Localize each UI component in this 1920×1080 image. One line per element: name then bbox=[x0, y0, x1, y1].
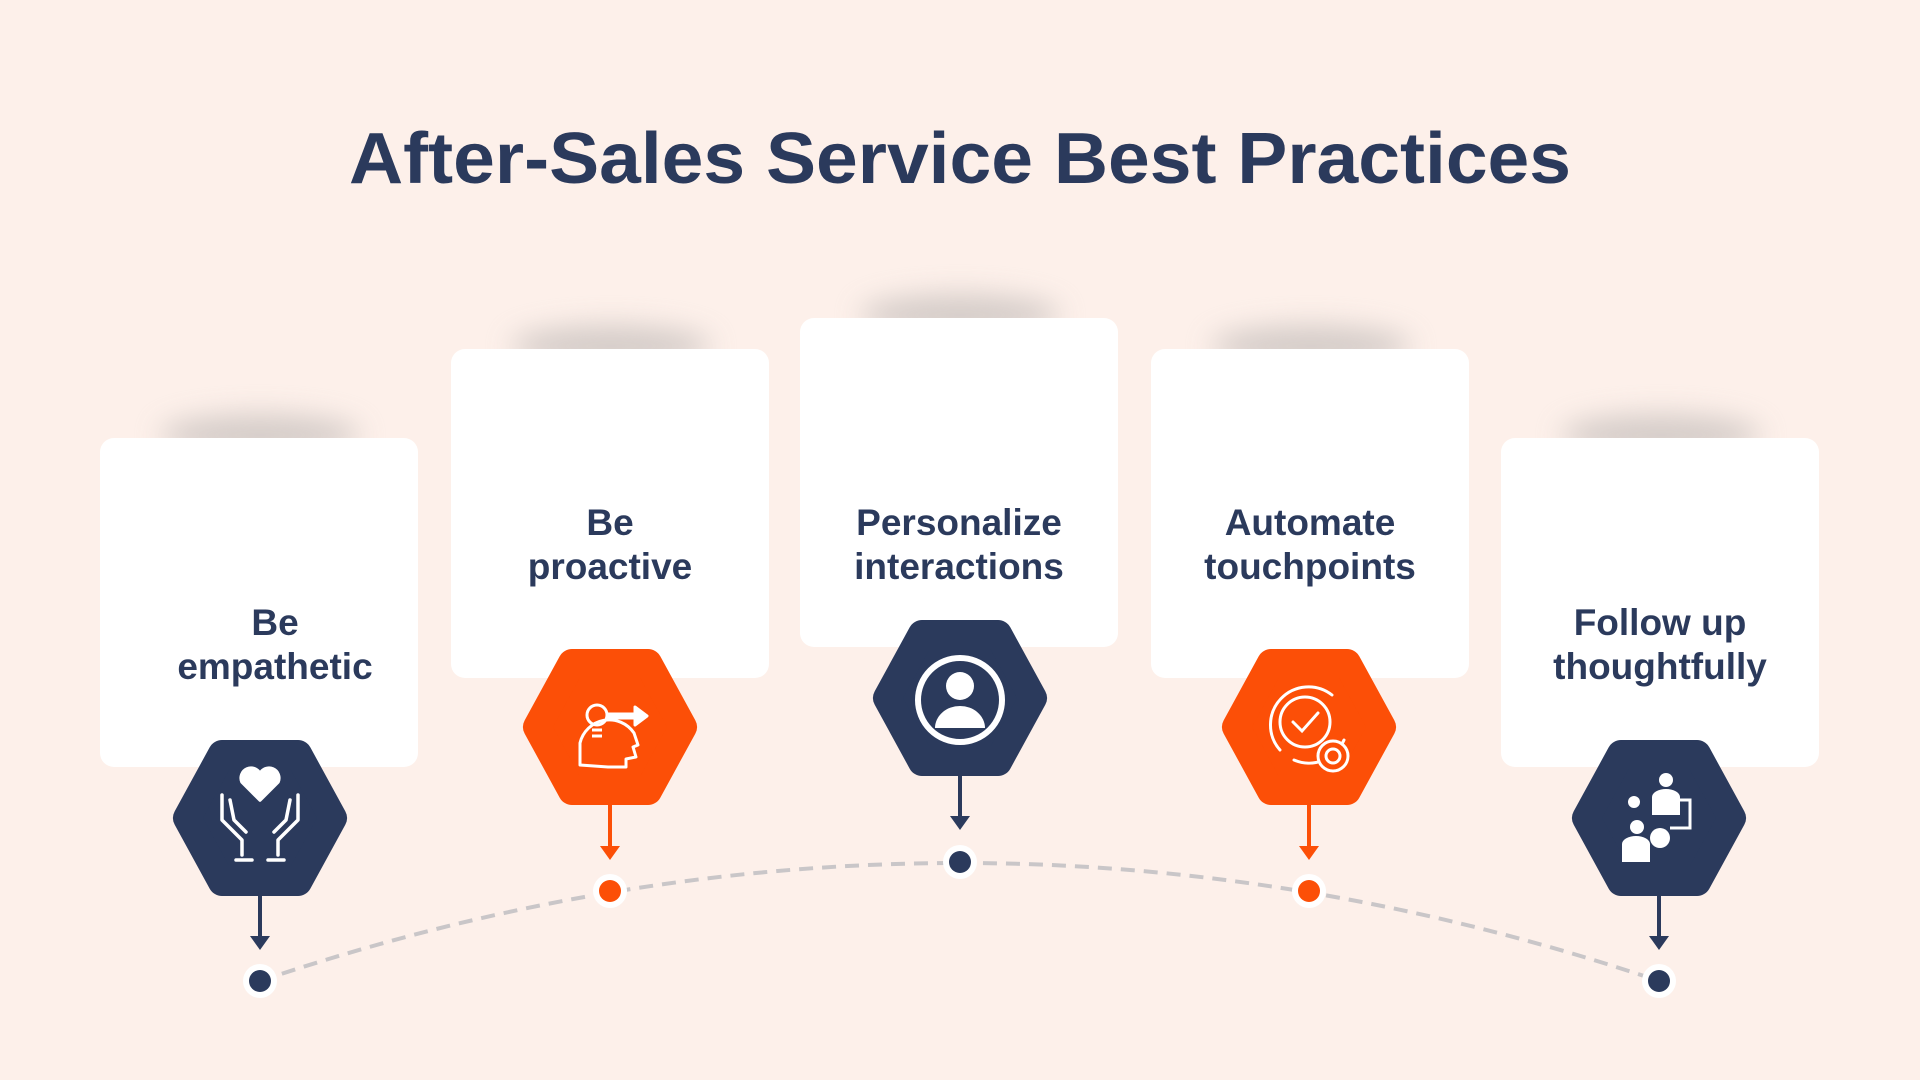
step 5 bbox=[1586, 754, 1732, 998]
card: be empathetic: empathetic bbox=[177, 646, 373, 687]
title: After-Sales Service Best Practices bbox=[349, 119, 1571, 199]
step 3 bbox=[887, 634, 1033, 879]
card: automate touchpoints: touchpoints bbox=[1204, 546, 1416, 587]
dashed arc bbox=[260, 863, 1659, 981]
card: be proactive: Be bbox=[586, 502, 634, 543]
step 1 hex + arrow + dot bbox=[187, 754, 333, 998]
step 2 bbox=[537, 663, 683, 908]
card: personalize interactions: Personalize bbox=[856, 502, 1062, 543]
card: be empathetic: Be bbox=[251, 602, 299, 643]
card: personalize interactions bbox=[800, 318, 1118, 647]
card: be empathetic bbox=[100, 438, 418, 767]
step 4 bbox=[1236, 663, 1382, 908]
card: automate touchpoints: Automate bbox=[1225, 502, 1395, 543]
card: follow up thoughtfully bbox=[1501, 438, 1819, 767]
card: follow up thoughtfully: thoughtfully bbox=[1553, 646, 1767, 687]
card: be proactive: proactive bbox=[528, 546, 692, 587]
card: personalize interactions: interactions bbox=[854, 546, 1064, 587]
card: be proactive bbox=[451, 349, 769, 678]
card: follow up thoughtfully: Follow up bbox=[1574, 602, 1746, 643]
card: automate touchpoints bbox=[1151, 349, 1469, 678]
